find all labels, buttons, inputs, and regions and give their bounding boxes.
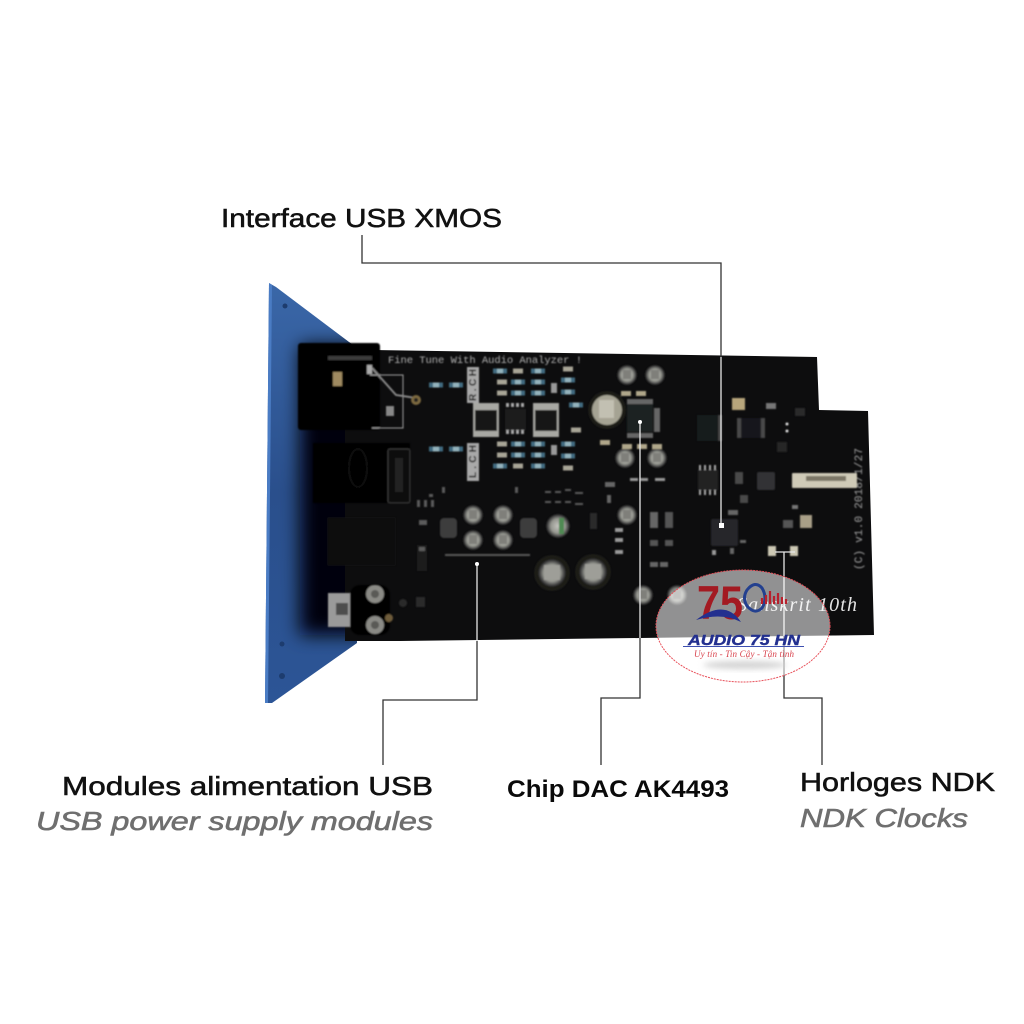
leader line: DAC chip xyxy=(601,420,642,765)
label: Chip DAC AK4493: Chip DAC AK4493 xyxy=(507,776,729,803)
label: Horloges NDK: Horloges NDK xyxy=(800,767,996,797)
silkscreen markings: Fine Tune With Audio Analyzer ! xyxy=(388,355,582,367)
label: USB power supply modules: USB power supply modules xyxy=(36,806,433,836)
power connector box xyxy=(328,518,395,565)
jack connector xyxy=(313,443,410,503)
silkscreen markings xyxy=(388,355,866,570)
silkscreen markings: L.CH xyxy=(468,445,479,478)
watermark: Audio 75 HN logo: 75 xyxy=(697,576,743,629)
watermark: Audio 75 HN logo: AUDIO 75 HN xyxy=(687,632,801,649)
label: Interface USB XMOS: Interface USB XMOS xyxy=(221,203,502,233)
digital section components xyxy=(590,398,857,567)
leader line: NDK clocks xyxy=(775,552,822,765)
leader line: USB power modules xyxy=(383,562,479,765)
DAC section capacitors xyxy=(588,365,687,605)
op-amp chips xyxy=(473,403,559,437)
watermark: Audio 75 HN logo xyxy=(656,570,830,682)
silkscreen markings: R.CH xyxy=(468,369,479,401)
silkscreen: Sanskrit 10th: Sanskrit 10th xyxy=(737,594,857,616)
XLR connector xyxy=(298,343,421,430)
leader line: USB XMOS xyxy=(362,235,724,528)
panel: circuit board product photo xyxy=(265,283,874,703)
watermark: Audio 75 HN logo: Uy tín - Tin Cậy - Tận tình xyxy=(694,649,794,659)
chip: AK4493 DAC xyxy=(627,399,660,438)
resistor arrays xyxy=(429,366,583,470)
silkscreen markings: (C) v1.0 2018/1/27 xyxy=(854,448,866,570)
blue metal front plate xyxy=(265,283,357,703)
label: NDK Clocks: NDK Clocks xyxy=(800,803,968,833)
black PCB xyxy=(345,350,874,641)
label: Modules alimentation USB: Modules alimentation USB xyxy=(62,771,433,801)
micro USB module xyxy=(328,585,393,635)
small SMD parts left xyxy=(399,487,583,607)
power section capacitors xyxy=(440,505,611,591)
